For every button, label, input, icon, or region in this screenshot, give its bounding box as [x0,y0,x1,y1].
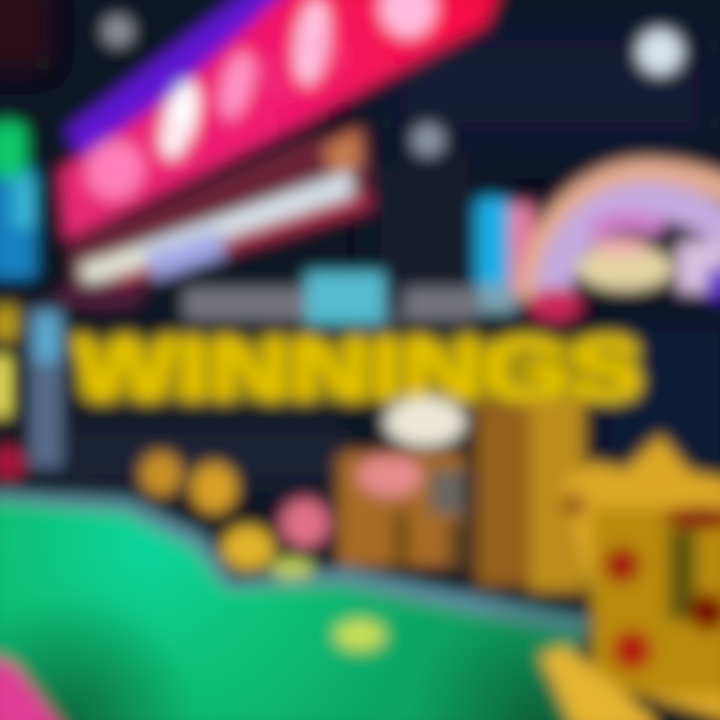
left yellow marks [0,306,25,480]
secondary white sign [70,126,372,300]
sign lettering: HOTTS [73,2,378,216]
headline: WINNINGS: WINNINGS [72,318,644,420]
left wall panel: green and blue [0,122,36,278]
coin stacks [338,398,584,592]
table chip [335,620,385,650]
pink corner [0,655,66,720]
ceiling lights [103,16,682,156]
gold coins [140,452,237,513]
sign text: BIG JACKPOTS [86,192,311,288]
yellow prize box with crown [540,435,720,720]
pink neon sign [60,0,500,240]
gold bar [540,645,655,720]
coins on table [222,499,329,578]
strip above yellow text [30,272,476,468]
green table [0,490,590,720]
rainbow sign [476,172,720,322]
